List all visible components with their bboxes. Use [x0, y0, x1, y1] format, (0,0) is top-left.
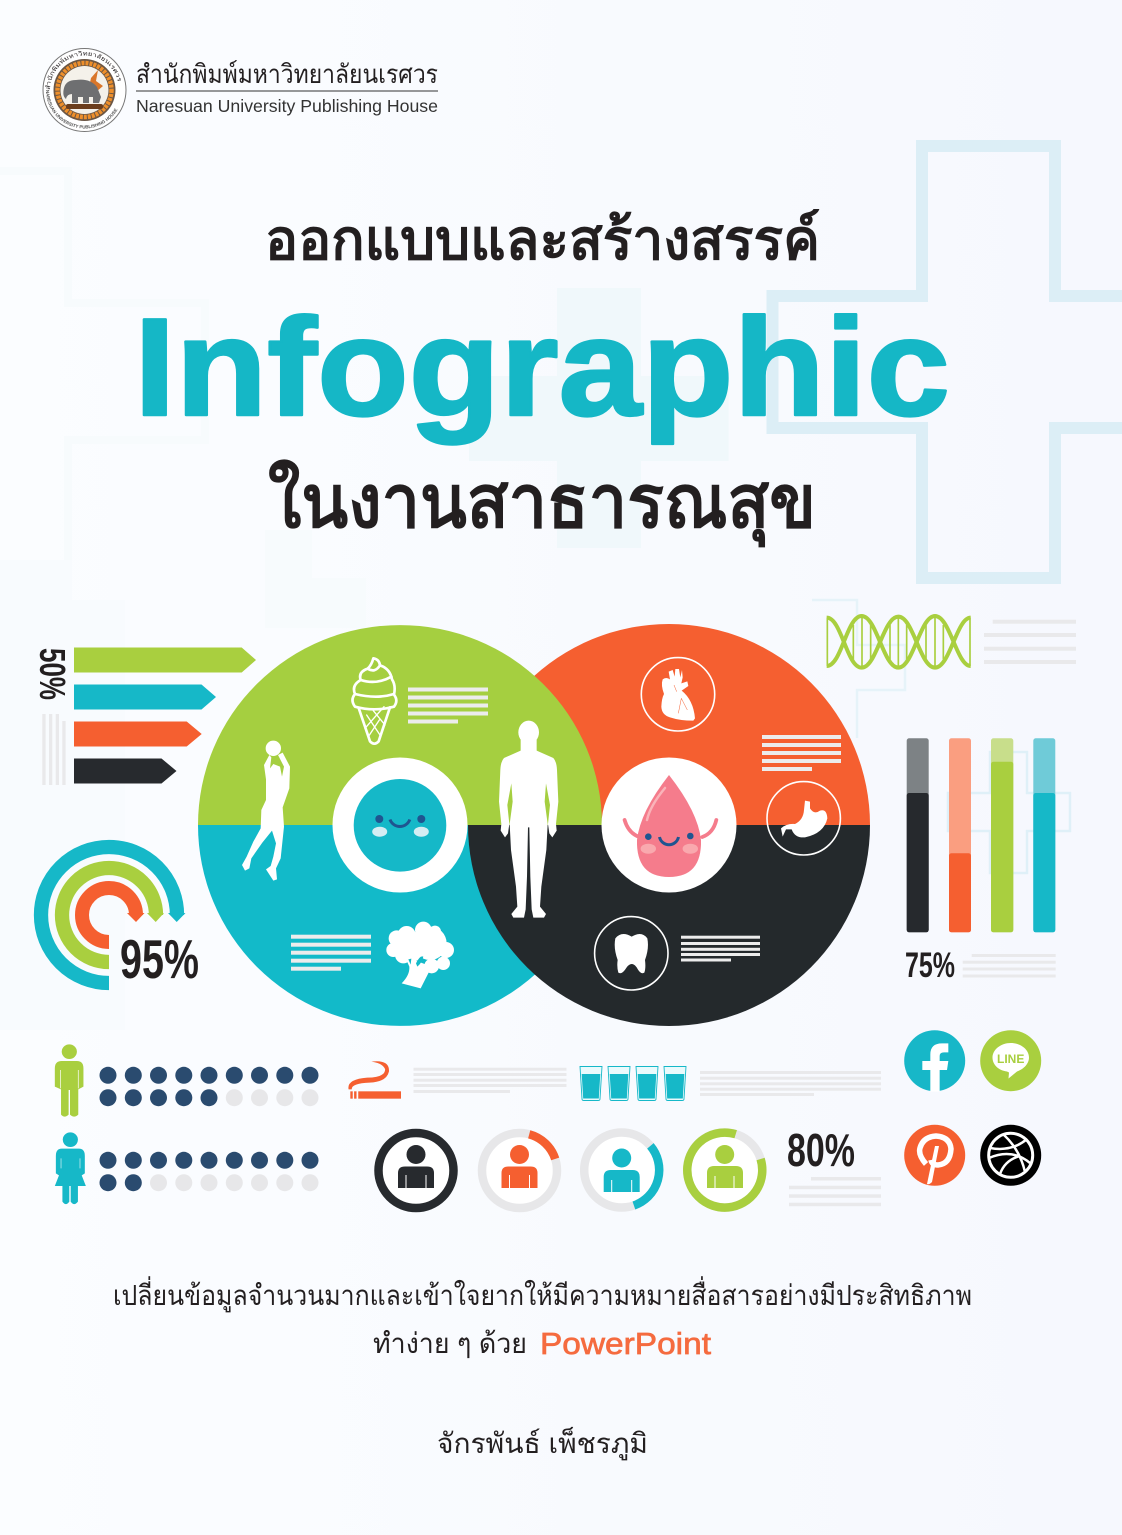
heading: design and create: ออกแบบและสร้างสรรค์	[265, 208, 820, 271]
glass 2	[608, 1066, 630, 1100]
background medical crosses	[0, 146, 1122, 1030]
icon: stomach	[767, 782, 840, 855]
icon: ice cream	[352, 658, 396, 744]
glass 4	[664, 1066, 686, 1100]
50 percent label: 50%	[32, 648, 73, 700]
subtitle line 2: ทำง่าย ๆ ด้วย	[373, 1328, 527, 1359]
dark bottom right half	[468, 825, 870, 1026]
heading: in public health: ในงานสาธารณสุข	[268, 458, 816, 548]
LINE wordmark: LINE	[997, 1052, 1024, 1066]
orange top right half	[468, 624, 870, 825]
text lines: green section	[408, 688, 488, 724]
80 percent label: 80%	[787, 1124, 855, 1176]
text lines beside DNA	[984, 620, 1076, 664]
95 percent label: 95%	[120, 928, 199, 990]
icon: heart	[641, 658, 715, 731]
subtitle line 1: เปลี่ยนข้อมูลจำนวนมากและเข้าใจยากให้มีความหมายสื่อสารอย่างมีประสิทธิภาพ	[113, 1276, 972, 1313]
PowerPoint highlight: PowerPoint	[540, 1326, 711, 1361]
text lines beside glasses	[700, 1071, 881, 1096]
text lines: dark section	[681, 936, 760, 962]
text lines beside cigarette	[414, 1068, 566, 1093]
person ring: teal	[584, 1132, 659, 1208]
text lines: orange section	[762, 735, 841, 771]
icon: DNA helix	[827, 616, 971, 668]
bar chart	[907, 738, 1055, 932]
icon: Pinterest	[904, 1125, 965, 1186]
glass 3	[636, 1066, 658, 1100]
main title: Infographic	[134, 290, 950, 445]
publisher Thai name: สำนักพิมพ์มหาวิทยาลัยนเรศวร	[136, 59, 438, 89]
radial progress chart	[41, 847, 186, 983]
author name: จักรพันธ์ เพ็ชรภูมิ	[437, 1426, 648, 1461]
person ring: green	[687, 1132, 762, 1208]
vertical text placeholder lines	[42, 714, 66, 785]
icon: tooth	[595, 917, 668, 990]
text lines beneath 80 percent	[789, 1177, 881, 1206]
text lines beside 75 percent	[963, 954, 1056, 978]
icon: broccoli	[386, 922, 454, 988]
icon: male figure	[55, 1044, 83, 1117]
text lines: teal section	[291, 935, 371, 971]
icon: human body	[499, 721, 558, 918]
teal bottom left half	[198, 825, 602, 1026]
icon: water glasses	[580, 1066, 686, 1100]
arrow bars chart	[74, 648, 256, 784]
venn diagram: body and health	[198, 624, 870, 1026]
icon: Dribbble	[980, 1125, 1041, 1186]
green top left half	[198, 625, 602, 825]
glass 1	[580, 1066, 602, 1100]
icon: cigarette	[348, 1061, 401, 1099]
publisher English name: Naresuan University Publishing House	[136, 96, 438, 116]
person ring: dark 100 percent	[378, 1133, 454, 1208]
seal ring english text: NARESUAN UNIVERSITY PUBLISHING HOUSE	[46, 90, 118, 129]
icon: Facebook	[904, 1030, 965, 1092]
right center circle with blood drop	[602, 758, 736, 892]
logo: Naresuan University Publishing House seal	[42, 48, 126, 132]
icon: LINE	[980, 1030, 1041, 1091]
seal ring text: สำนักพิมพ์มหาวิทยาลัยนเรศวร	[45, 51, 121, 90]
left center ring and smiley	[332, 758, 468, 892]
icon: female figure	[55, 1132, 86, 1204]
icon: basketball player	[242, 741, 290, 881]
dot row: female	[100, 1152, 318, 1191]
dot row: male	[100, 1067, 318, 1106]
person ring: orange	[482, 1133, 557, 1208]
75 percent label: 75%	[905, 946, 955, 985]
publisher name	[136, 59, 438, 116]
